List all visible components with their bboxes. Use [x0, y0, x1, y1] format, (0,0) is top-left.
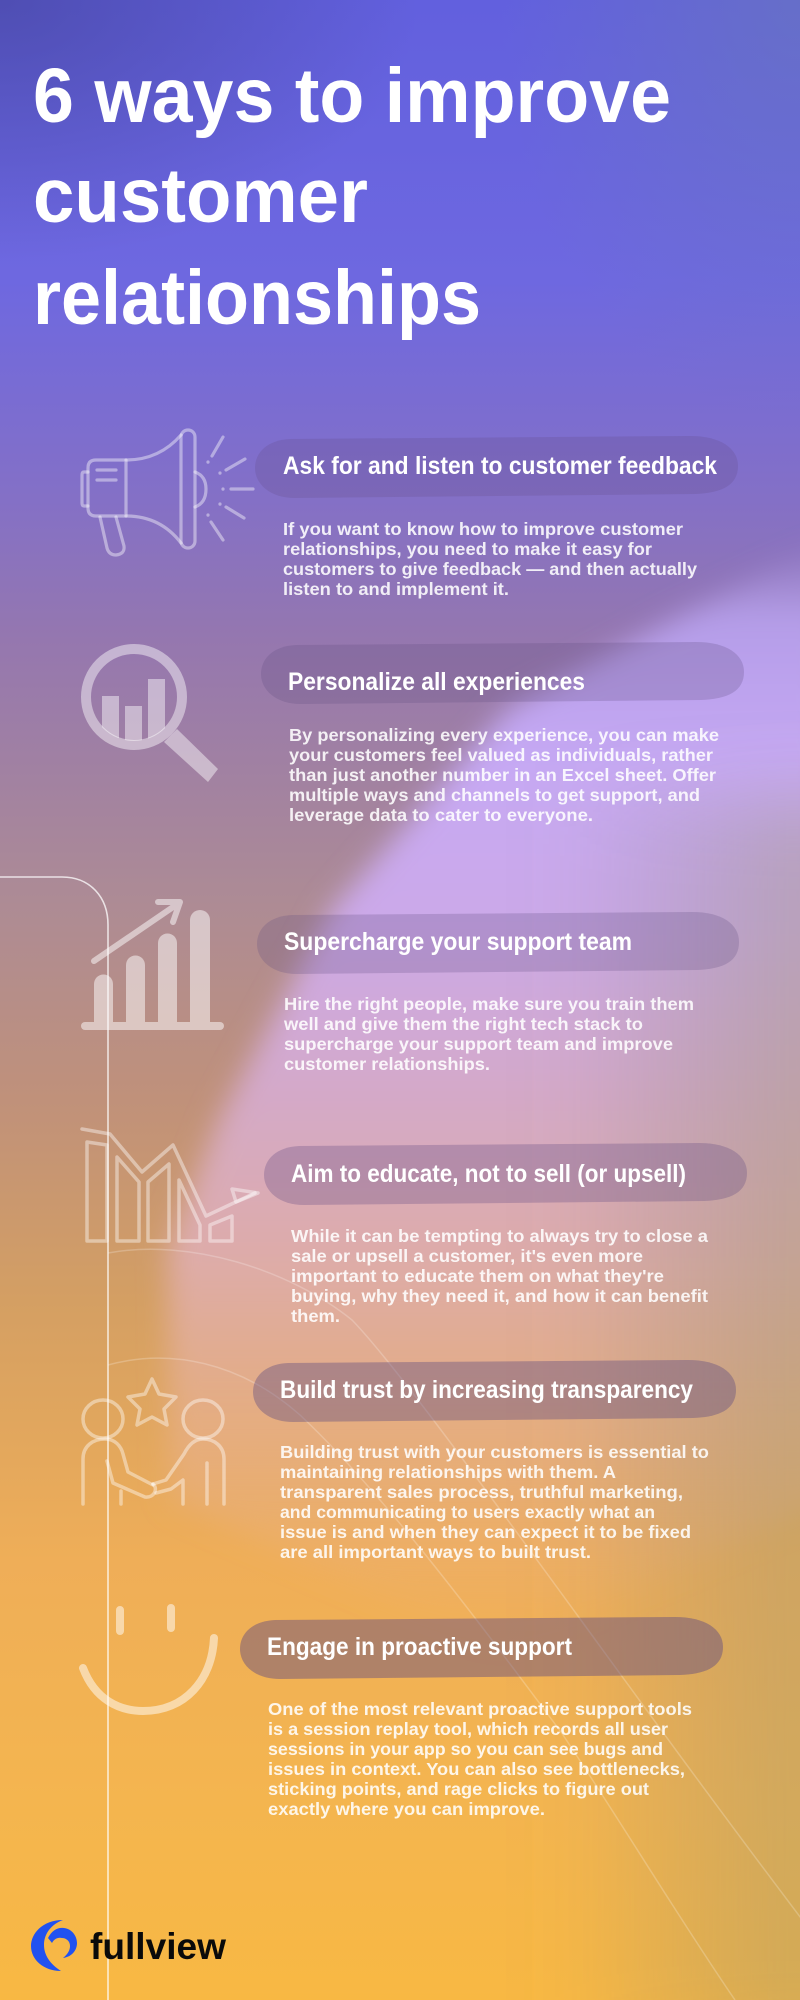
body text: your customers feel valued as individuals, rather	[289, 745, 713, 765]
icon: falling chart	[82, 1129, 258, 1241]
title	[33, 53, 671, 341]
body text: issue is and when they can expect it to be fixed	[280, 1522, 691, 1542]
body text: relationships, you need to make it easy for	[283, 539, 652, 559]
body text: maintaining relationships with them. A	[280, 1462, 616, 1482]
body text	[283, 994, 694, 1074]
title: customer	[33, 153, 368, 239]
body text: than just another number in an Excel sheet. Offer	[289, 765, 716, 785]
body text: buying, why they need it, and how it can benefit	[291, 1286, 708, 1306]
body text	[268, 1699, 692, 1819]
heading: Build trust by increasing transparency	[280, 1376, 693, 1404]
body text: multiple ways and channels to get support, and	[289, 785, 700, 805]
body text: customer relationships.	[284, 1054, 490, 1074]
body text: supercharge your support team and improve	[284, 1034, 673, 1054]
section 6: proactive support	[83, 1608, 723, 1819]
heading pill	[240, 1617, 723, 1679]
body text: sessions in your app so you can see bugs and	[268, 1739, 663, 1759]
heading pill	[253, 1360, 736, 1422]
body text: If you want to know how to improve customer	[283, 519, 683, 539]
body text: well and give them the right tech stack to	[283, 1014, 643, 1034]
icon: blue swirl	[31, 1920, 77, 1971]
body text: is a session replay tool, which records all user	[268, 1719, 668, 1739]
title: 6 ways to improve	[33, 53, 671, 139]
body text: sticking points, and rage clicks to figure out	[268, 1779, 649, 1799]
logo: fullview	[31, 1920, 226, 1971]
icon: magnifier with bars	[86, 649, 218, 782]
heading pill	[261, 642, 744, 704]
body text	[291, 1226, 708, 1326]
heading pill	[264, 1143, 747, 1205]
icon: smiley	[83, 1608, 214, 1711]
heading pill	[255, 436, 738, 498]
heading: Aim to educate, not to sell (or upsell)	[291, 1160, 686, 1188]
body text: By personalizing every experience, you can make	[289, 725, 719, 745]
wordmark: fullview	[90, 1926, 226, 1967]
body text: Building trust with your customers is essential to	[280, 1442, 709, 1462]
body text: customers to give feedback — and then actually	[283, 559, 697, 579]
body text	[280, 1442, 709, 1562]
body text: leverage data to cater to everyone.	[289, 805, 593, 825]
body text: transparent sales process, truthful marketing,	[280, 1482, 683, 1502]
body text: While it can be tempting to always try to close a	[291, 1226, 708, 1246]
body text: and communicating to users exactly what an	[280, 1502, 655, 1522]
heading pill	[257, 912, 739, 974]
body text: important to educate them on what they're	[291, 1266, 664, 1286]
body text: issues in context. You can also see bottlenecks,	[268, 1759, 685, 1779]
section 4: educate	[82, 1129, 747, 1326]
icon: megaphone	[82, 430, 253, 555]
decorative thin lines	[0, 877, 800, 2000]
icon: handshake and star	[83, 1379, 224, 1504]
section 5: trust	[83, 1360, 736, 1562]
body text: are all important ways to built trust.	[280, 1542, 591, 1562]
heading: Ask for and listen to customer feedback	[283, 452, 717, 480]
section 1: feedback	[82, 430, 738, 599]
heading: Personalize all experiences	[288, 668, 585, 696]
icon: rising bar chart	[81, 902, 224, 1030]
body text: One of the most relevant proactive support tools	[268, 1699, 692, 1719]
heading: Engage in proactive support	[267, 1633, 573, 1661]
section 2: personalize	[86, 642, 744, 825]
body text	[289, 725, 719, 825]
body text: sale or upsell a customer, it's even more	[291, 1246, 643, 1266]
body text: Hire the right people, make sure you train them	[284, 994, 694, 1014]
section 3: support team	[81, 902, 739, 1074]
heading: Supercharge your support team	[284, 928, 632, 956]
title: relationships	[33, 255, 481, 341]
body text: them.	[291, 1306, 340, 1326]
body text	[283, 519, 697, 599]
body text: exactly where you can improve.	[268, 1799, 545, 1819]
body text: listen to and implement it.	[283, 579, 509, 599]
